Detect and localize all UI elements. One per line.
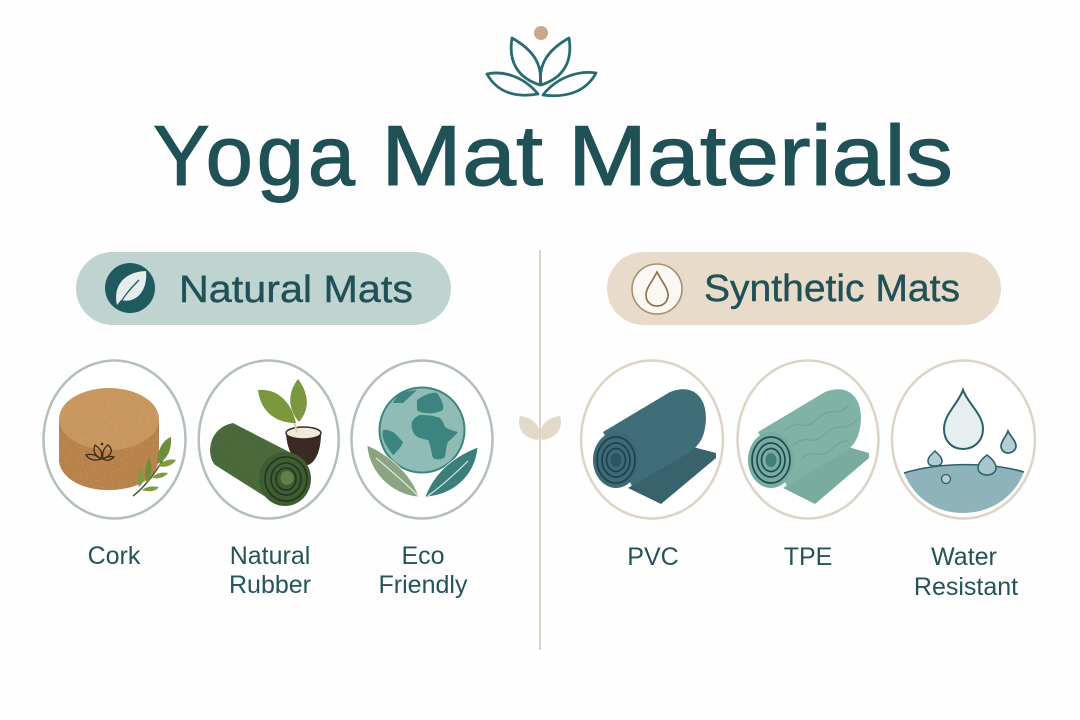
label: cork: Cork [88,542,141,570]
icon: olive sprig [133,437,176,496]
item: tpe [738,360,878,571]
label: eco friendly: Eco [401,542,445,570]
center divider [519,250,561,650]
item: natural rubber [199,360,339,599]
icon: globe and leaves [367,388,478,497]
panel: natural mats heading [76,252,451,325]
icon: water drops on surface [904,390,1024,513]
item: water resistant [892,360,1035,601]
icon: potted plant [258,379,321,465]
label: water resistant: Resistant [914,573,1018,601]
item: cork [44,360,186,570]
icon: lotus logo [487,26,596,96]
heading: synthetic mats: Synthetic Mats [704,268,960,310]
label: pvc: PVC [627,543,679,571]
icon: tpe mat roll [748,389,869,504]
item: pvc [581,360,723,571]
label: water resistant: Water [931,543,997,571]
panel: synthetic mats heading [607,252,1001,325]
label: natural rubber: Rubber [229,571,311,599]
item: eco friendly [352,360,492,599]
label: natural rubber: Natural [230,542,310,570]
icon: green rubber mat roll [210,423,311,506]
label: tpe: TPE [784,543,832,571]
icon: leaf badge [105,263,155,313]
title: Mat [381,109,543,204]
icon: pvc mat roll [593,389,716,504]
icon: cork block [59,388,176,496]
title [153,109,953,204]
label: eco friendly: Friendly [379,571,468,599]
icon: water drop badge [632,264,682,314]
heading: natural mats: Natural Mats [179,269,413,311]
title: Materials [568,109,953,204]
title: Yoga [153,109,356,204]
